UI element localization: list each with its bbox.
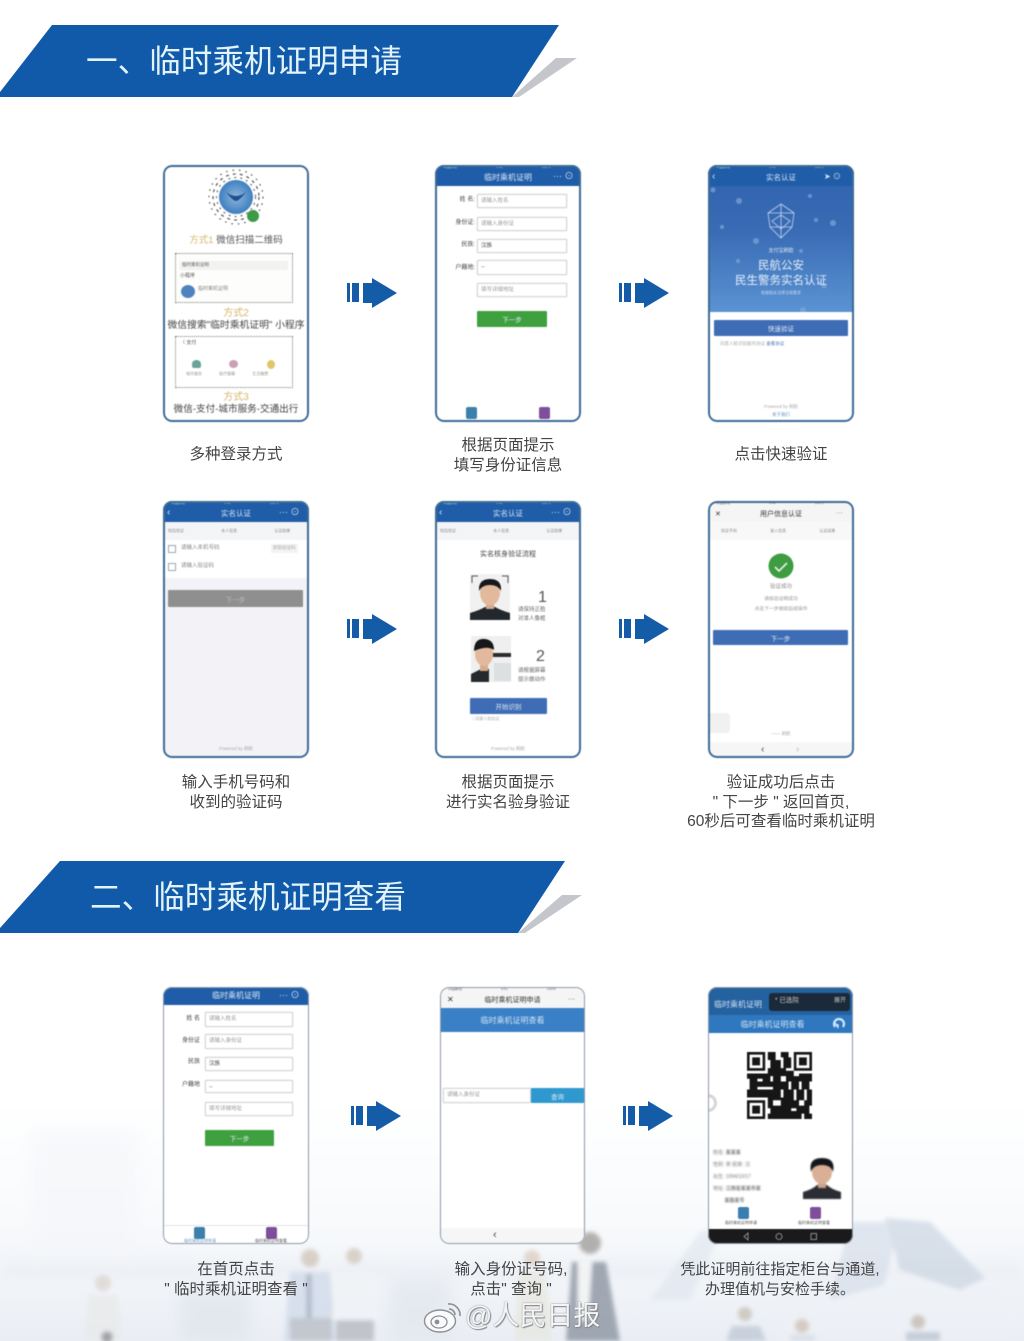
button: query	[531, 1088, 584, 1103]
status bar: 中国移动 9:41 100%	[443, 501, 551, 505]
icon: mini program code	[208, 169, 264, 226]
powered by: Powered by 刷脸	[764, 404, 798, 409]
stepper text: 验证手机 录入信息 认证成果	[721, 528, 835, 533]
input: name	[477, 194, 567, 208]
powered by: —— 刷脸	[771, 731, 791, 736]
button: start	[470, 698, 547, 714]
arrow	[347, 614, 397, 644]
arrow	[619, 614, 669, 644]
hero caption: 依据相关法律法规要求	[761, 290, 801, 295]
label: 姓 名:	[460, 197, 475, 203]
certificate details: 性别: 男 民族: 汉	[713, 1162, 750, 1168]
icon: code	[168, 563, 176, 571]
back chevron: ‹	[493, 1229, 497, 1241]
watermark: Weibo logo	[424, 1303, 461, 1333]
caption: 进行实名验身验证	[446, 794, 570, 810]
black android nav bar	[708, 1229, 853, 1244]
tab label: 临时乘机证明查看	[255, 1238, 287, 1243]
heading: section 2 title: 二、临时乘机证明查看	[90, 879, 406, 915]
watermark: account name: @人民日报	[465, 1301, 600, 1331]
photo: frontal face	[469, 574, 511, 621]
header	[435, 165, 581, 186]
more icon: ···	[836, 510, 843, 517]
step 1 text	[518, 605, 546, 622]
caption	[182, 774, 290, 810]
input: name: 请输入姓名	[481, 198, 509, 204]
phone: face verification steps	[435, 501, 581, 758]
caption	[164, 1260, 308, 1298]
forward chevron: ›	[796, 744, 799, 755]
grey floating tab	[710, 713, 730, 733]
input: ID: 请输入身份证	[481, 221, 514, 227]
header title: 临时乘机证明	[484, 173, 532, 182]
label: 户籍地	[182, 1082, 200, 1088]
status bar: 中国移动 9:41 100%	[716, 501, 824, 505]
nav label: 〈 支付	[180, 340, 196, 346]
hero small label: 支付宝刷脸	[768, 248, 794, 254]
hero heading: 民航公安	[758, 260, 804, 272]
input: ID number: 请输入身份证	[447, 1092, 480, 1098]
app name: 临时乘机证明	[198, 286, 228, 292]
icon: view tab	[539, 407, 550, 419]
header title: 实名认证	[221, 509, 251, 518]
blue band title	[440, 1008, 585, 1032]
agreement: 同意人脸识别服务协议 查看协议	[720, 341, 784, 346]
caption: 60秒后可查看临时乘机证明	[687, 813, 875, 830]
input: address	[477, 283, 567, 297]
caption: 在首页点击	[197, 1261, 275, 1278]
tab label: 临时乘机证明申请	[725, 1220, 757, 1225]
certificate details	[712, 1148, 762, 1204]
caption: 验证成功后点击	[727, 774, 835, 791]
header title: 实名认证	[766, 173, 796, 182]
stepper text: 短信验证 本人信息 认证结果	[440, 528, 562, 533]
input: address	[205, 1102, 293, 1116]
text: method 2 description: 微信搜索"临时乘机证明" 小程序	[167, 320, 305, 331]
status bar: 中国移动 9:41 100%	[171, 501, 279, 505]
success detail: 请核验证明成功	[764, 597, 798, 602]
status bar: 中国移动 9:41 100%	[716, 165, 824, 169]
blue band title: 临时乘机证明查看	[480, 1016, 544, 1024]
input: address: 填写详细地址	[481, 287, 514, 293]
caption	[454, 436, 562, 474]
blue hero panel	[708, 165, 854, 312]
pill action: 展开	[834, 998, 846, 1004]
arrow	[347, 278, 397, 308]
caption: " 临时乘机证明查看 "	[164, 1280, 308, 1298]
button: quick verify	[714, 320, 848, 336]
footer link: 关于我们	[772, 412, 790, 417]
label: 身份证	[182, 1038, 200, 1044]
step 2 text	[518, 666, 546, 682]
section banner 2	[0, 861, 582, 933]
screenshot: WeChat search	[175, 253, 293, 303]
stepper	[435, 522, 581, 540]
icon: success check	[768, 552, 794, 580]
phone: real-name verification landing	[708, 165, 854, 422]
back chevron: ‹	[712, 171, 715, 182]
phone: certificate view	[708, 987, 853, 1244]
phone: certificate view: 某路某号	[724, 1198, 744, 1204]
woman	[524, 1250, 540, 1266]
black selection pill	[769, 993, 850, 1011]
button: start: 开始识别	[496, 704, 522, 711]
text: method 3 description: 微信-支付-城市服务-交通出行	[174, 404, 298, 415]
lower-right group	[738, 1307, 752, 1321]
caption	[455, 1260, 567, 1298]
caption: 输入身份证号码,	[455, 1261, 567, 1278]
input: ethnicity: 汉族	[209, 1061, 220, 1067]
section label: 小程序	[180, 273, 195, 279]
placeholder: 请输入本机号码	[181, 545, 220, 551]
blue band title	[708, 1015, 853, 1033]
grey ring remnant	[699, 1094, 717, 1112]
header	[163, 501, 309, 522]
input: name: 请输入姓名	[209, 1016, 237, 1022]
header	[708, 165, 854, 186]
QR code	[746, 1051, 813, 1120]
certificate details: 地址: 江西省某某市某	[713, 1186, 761, 1192]
button: next	[477, 311, 547, 327]
icon: medical	[267, 360, 275, 369]
step 2 text: 请根据屏幕	[518, 668, 546, 674]
input: domicile	[477, 260, 567, 275]
tab bar divider	[163, 1225, 309, 1226]
bottom nav	[440, 1228, 585, 1244]
button: next disabled	[168, 590, 303, 607]
status bar: 中国移动 9:41 100%	[448, 987, 556, 991]
text: method 1: 方式1 微信扫描二维码	[189, 235, 283, 246]
header	[163, 987, 309, 1005]
header title: 实名认证	[493, 509, 523, 518]
tab label: 临时乘机证明申请	[184, 1238, 216, 1243]
hero subheading: 民生警务实名认证	[735, 275, 827, 287]
status bar: 中国移动 9:41 100%	[443, 165, 551, 169]
phone: ID query	[440, 987, 585, 1244]
white form panel	[163, 540, 309, 578]
caption: 凭此证明前往指定柜台与通道,	[680, 1261, 880, 1278]
header	[435, 501, 581, 522]
text: method 2: 方式2	[223, 308, 249, 319]
input: name	[205, 1012, 293, 1027]
caption	[680, 1261, 880, 1298]
label: 姓 名	[186, 1016, 200, 1022]
caption: 点击快速验证	[734, 446, 828, 463]
left figure	[95, 1275, 111, 1291]
input: ethnicity: 汉族	[481, 243, 492, 249]
label: 民族	[188, 1059, 200, 1065]
button: next: 下一步	[230, 1136, 249, 1143]
input: ethnicity	[205, 1057, 293, 1071]
text: method 3: 方式3	[223, 392, 249, 403]
stepper	[708, 522, 854, 540]
caption: 办理值机与安检手续。	[705, 1280, 855, 1298]
step 1 text: 对准人像框	[518, 616, 546, 622]
header controls: ··· ⊙	[553, 171, 574, 181]
button: next	[205, 1130, 274, 1146]
icon: app	[181, 285, 195, 298]
phone: phone number entry	[163, 501, 309, 758]
service labels: 城市服务 医疗健康 生活缴费	[186, 371, 268, 376]
photo: side action face	[470, 636, 512, 683]
header controls: ➤ ⊙	[824, 172, 841, 181]
input: ID: 请输入身份证	[209, 1038, 242, 1044]
phone: verification success	[708, 501, 854, 758]
screenshot: WeChat pay services	[175, 336, 293, 388]
header title: 用户信息认证	[760, 511, 802, 518]
heading: section 1 title: 一、临时乘机证明申请	[86, 43, 402, 79]
man in dark suit	[579, 1232, 601, 1254]
back chevron: ‹	[167, 507, 170, 518]
button: next: 下一步	[502, 317, 522, 324]
light header	[708, 501, 854, 522]
label: 民族:	[461, 242, 475, 248]
phone: identity form	[435, 165, 581, 422]
icon: apply tab	[738, 1207, 749, 1219]
photo: holder portrait	[802, 1156, 842, 1200]
header title: 临时乘机证明	[714, 1000, 762, 1009]
step 2 text: 提示做动作	[518, 676, 546, 682]
tab label: 临时乘机证明查看	[798, 1220, 830, 1225]
input: domicile	[205, 1080, 293, 1093]
label: 户籍地:	[455, 265, 475, 271]
more icon: ···	[568, 996, 575, 1003]
powered by: Powered by 刷脸	[219, 746, 253, 751]
header controls: ··· ⊙	[279, 507, 300, 517]
icon: city services	[192, 360, 201, 368]
icon: view tab	[810, 1207, 821, 1219]
certificate details: 姓名: 某某某	[713, 1150, 741, 1156]
header title: 临时乘机证明申请	[484, 997, 540, 1004]
caption: 多种登录方式	[189, 446, 282, 463]
header title: 临时乘机证明	[212, 991, 260, 1000]
label: 身份证:	[455, 220, 475, 226]
back chevron: ‹	[439, 507, 442, 518]
icon: view tab	[266, 1227, 277, 1239]
snow dots	[710, 187, 836, 312]
pill text: * 已选院	[775, 997, 799, 1004]
caption: 输入手机号码和	[182, 774, 290, 791]
emblem	[767, 203, 795, 239]
input: domicile: --	[481, 264, 485, 270]
phone: home with view tab	[163, 987, 309, 1244]
caption: 根据页面提示	[461, 774, 554, 791]
bottom nav	[708, 742, 854, 758]
icon: phone	[168, 545, 176, 553]
android nav icons	[743, 1232, 818, 1242]
caption: " 下一步 " 返回首页,	[713, 794, 849, 810]
button: next disabled: 下一步	[226, 596, 245, 604]
button: query: 查询	[551, 1094, 564, 1100]
success detail	[754, 596, 808, 612]
caption: 根据页面提示	[461, 437, 554, 454]
header controls: ··· ⊙	[279, 990, 300, 1000]
input: ID number	[443, 1088, 531, 1103]
stepper	[163, 522, 309, 540]
section heading: 实名核身验证流程	[480, 551, 536, 558]
caption: 点击" 查询 "	[470, 1280, 552, 1298]
search bar	[180, 261, 288, 270]
certificate details: 出生: 1994/10/17	[713, 1174, 751, 1180]
caption: 填写身份证信息	[454, 456, 562, 474]
success title: 验证成功	[770, 584, 792, 590]
dark blue header	[708, 987, 853, 1015]
step 1 text: 请保持正脸	[518, 607, 546, 613]
input: domicile: --	[209, 1084, 213, 1090]
phone: login methods	[163, 165, 309, 422]
icon: life payment	[229, 360, 238, 368]
caption: 收到的验证码	[189, 794, 282, 810]
button: next: 下一步	[771, 636, 790, 642]
input: ethnicity	[477, 239, 567, 253]
man in white shirt	[346, 1248, 362, 1264]
input: ID	[477, 217, 567, 231]
button: next	[713, 630, 848, 645]
placeholder: 请输入验证码	[181, 563, 214, 569]
man with tie	[301, 1249, 319, 1267]
arrow	[623, 1101, 673, 1131]
search bar: 临时乘机证明	[182, 262, 209, 267]
arrow	[351, 1101, 401, 1131]
step number 2: 2	[536, 648, 545, 665]
caption	[446, 774, 570, 810]
band text: 临时乘机证明查看	[740, 1020, 804, 1029]
get code button: 获取验证码	[273, 545, 296, 550]
powered by: Powered by 刷脸	[491, 746, 525, 751]
get code button	[271, 544, 298, 552]
agreement: □ 同意人脸验证	[472, 716, 500, 721]
icon: apply tab	[466, 407, 477, 419]
button: quick verify: 快速验证	[768, 326, 794, 333]
back chevron: ‹	[761, 744, 764, 755]
arrow	[619, 278, 669, 308]
caption	[687, 774, 875, 830]
input: address: 填写详细地址	[209, 1106, 242, 1112]
section banner 1	[0, 25, 577, 97]
plane	[650, 1225, 724, 1300]
stepper text: 短信验证 本人信息 认证结果	[168, 528, 290, 533]
icon: apply tab	[194, 1227, 205, 1239]
refresh icon	[832, 1017, 846, 1030]
close icon: ✕	[715, 511, 721, 518]
status and title bar	[440, 987, 585, 1008]
input: ID	[205, 1034, 293, 1049]
header controls: ··· ⊙	[551, 507, 572, 517]
success detail: 点击下一步继续后续操作	[755, 606, 807, 612]
step number 1: 1	[538, 589, 547, 606]
close icon: ✕	[447, 995, 454, 1004]
